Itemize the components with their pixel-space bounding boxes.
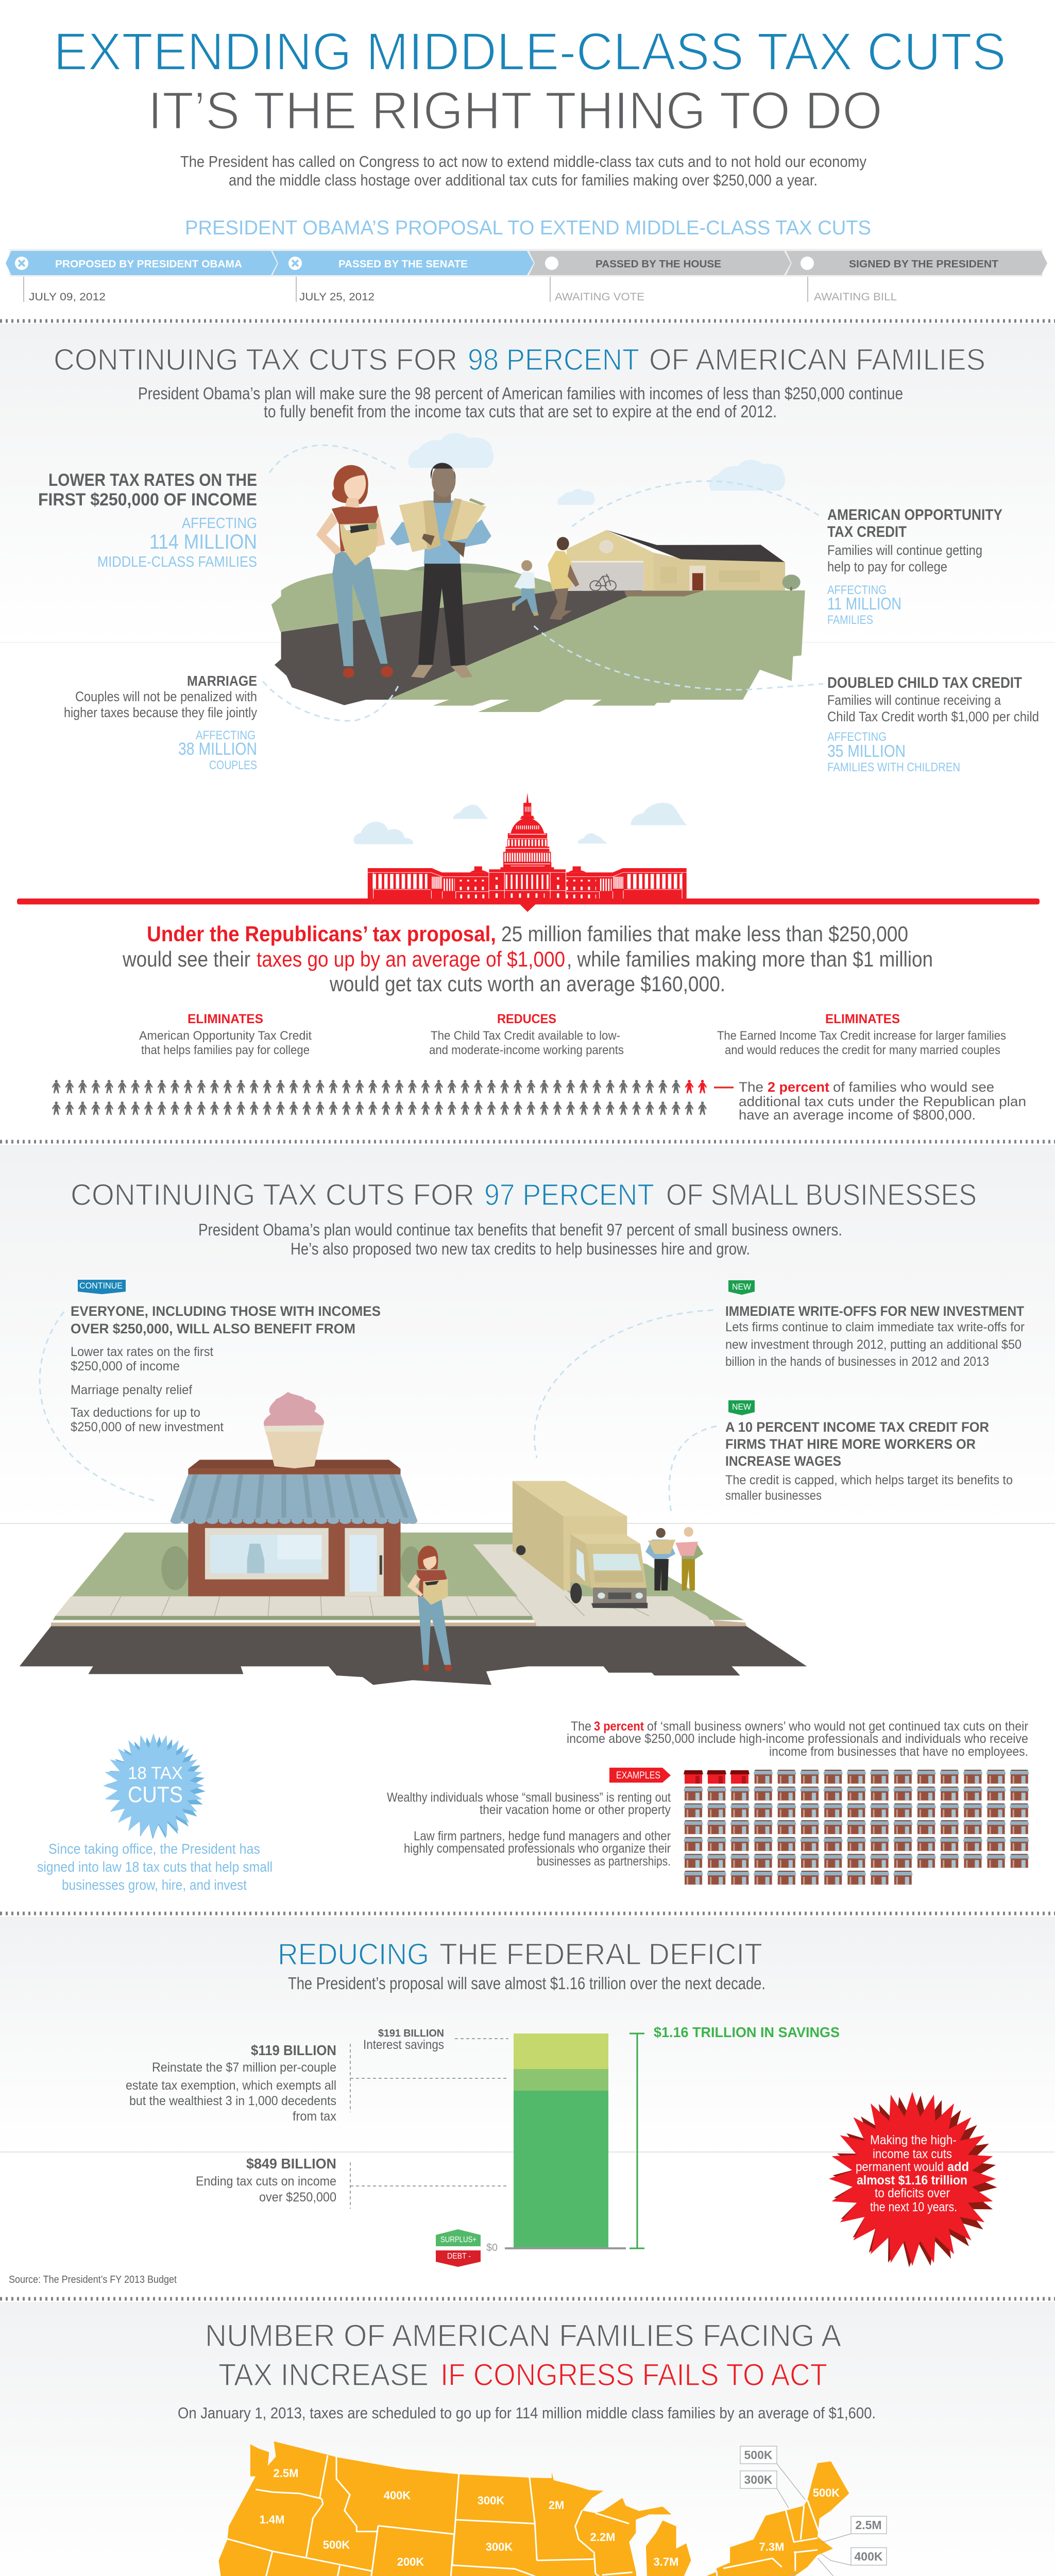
text: marriage: 38 MILLION bbox=[178, 739, 257, 759]
text: examples description: their vacation home or other property bbox=[480, 1803, 671, 1817]
bar chart: savings stack: $0 bbox=[486, 2242, 498, 2253]
figure: woman with bag bbox=[407, 1546, 452, 1671]
heading: 97 percent: CONTINUING TAX CUTS FOR bbox=[71, 1178, 474, 1212]
heading: 97 percent: OF SMALL BUSINESSES bbox=[666, 1178, 977, 1212]
heading: 97 percent: 97 PERCENT bbox=[484, 1178, 654, 1212]
column: eliminates earned income: and would reduces the credit for many married couples bbox=[725, 1043, 1000, 1057]
text: 3 percent note: 3 percent bbox=[594, 1719, 644, 1734]
ground bbox=[53, 1533, 744, 1620]
callout: 18 tax cuts starburst: CUTS bbox=[128, 1782, 183, 1807]
text: 849 billion: over $250,000 bbox=[259, 2190, 336, 2205]
column: eliminates american opportunity bbox=[139, 1012, 312, 1057]
map: state labels: 300K bbox=[478, 2494, 504, 2507]
map: state labels: 3.7M bbox=[654, 2555, 678, 2568]
text: 849 billion: $849 BILLION bbox=[246, 2156, 336, 2172]
chart: people pictogram bbox=[52, 1080, 734, 1116]
column: eliminates american opportunity: American Opportunity Tax Credit bbox=[139, 1029, 312, 1043]
text: immediate write-offs: billion in the hands of businesses in 2012 and 2013 bbox=[725, 1354, 989, 1369]
text: since taking office bbox=[37, 1841, 273, 1893]
tag: examples: EXAMPLES bbox=[616, 1770, 660, 1781]
road bbox=[20, 1626, 807, 1685]
text: 10 percent income tax credit bbox=[725, 1419, 1013, 1503]
text: 97 percent intro: President Obama’s plan would continue tax benefits that benefit 97 percent of small business owners. bbox=[198, 1221, 842, 1239]
badge: new bbox=[728, 1280, 755, 1295]
chart: small business pictogram bbox=[683, 1770, 1032, 1885]
road bbox=[275, 590, 642, 705]
icon: capitol building bbox=[354, 792, 687, 899]
timeline: bill progress bbox=[6, 249, 1047, 303]
text: 849 billion bbox=[196, 2156, 336, 2205]
column: eliminates american opportunity: that helps families pay for college bbox=[141, 1043, 310, 1057]
text: 97 percent intro: He’s also proposed two new tax credits to help businesses hire and grow. bbox=[291, 1240, 750, 1258]
timeline: bill progress: AWAITING BILL bbox=[814, 291, 897, 303]
text: 3 percent note: income from businesses that have no employees. bbox=[769, 1744, 1028, 1759]
panel: 97 percent background bbox=[0, 1145, 1055, 1523]
heading: 98 percent: CONTINUING TAX CUTS FOR bbox=[54, 343, 457, 377]
icon: cupcake bbox=[264, 1392, 324, 1468]
timeline: bill progress: PASSED BY THE SENATE bbox=[338, 259, 468, 270]
text: republicans' proposal: Under the Republicans’ tax proposal, bbox=[147, 922, 496, 946]
text: immediate write-offs: new investment through 2012, putting an additional $50 bbox=[725, 1337, 1022, 1352]
text: doubled child tax credit bbox=[827, 674, 1039, 774]
trees bbox=[161, 1546, 421, 1590]
column: eliminates earned income: The Earned Income Tax Credit increase for larger families bbox=[717, 1029, 1006, 1043]
text: examples description: Law firm partners, hedge fund managers and other bbox=[414, 1829, 671, 1843]
text: deficit intro: The President’s proposal will save almost $1.16 trillion over the next decade. bbox=[288, 1974, 765, 1993]
heading: reducing the deficit: REDUCING bbox=[278, 1938, 429, 1971]
text: 2 percent note: 2 percent bbox=[768, 1079, 829, 1095]
text: doubled child tax credit: 35 MILLION bbox=[827, 741, 906, 760]
text: republicans' proposal: , while families making more than $1 million bbox=[567, 947, 933, 971]
text: 10 percent income tax credit: smaller businesses bbox=[725, 1488, 822, 1503]
legend: surplus and debt bbox=[436, 2229, 481, 2267]
heading: 97 percent bbox=[71, 1178, 977, 1212]
badge: new second bbox=[728, 1400, 755, 1415]
text: american opportunity tax credit: help to pay for college bbox=[827, 559, 947, 574]
text: lower tax rates: MIDDLE-CLASS FAMILIES bbox=[97, 554, 257, 570]
text: lower tax rates bbox=[38, 470, 257, 570]
text: 2 percent note: additional tax cuts under the Republican plan bbox=[739, 1094, 1026, 1109]
column: reduces child tax credit: The Child Tax Credit available to low- bbox=[431, 1029, 620, 1043]
title: EXTENDING MIDDLE-CLASS TAX CUTS bbox=[54, 22, 1006, 81]
text: 97 percent intro bbox=[198, 1221, 842, 1258]
text: everyone benefits: $250,000 of income bbox=[71, 1359, 180, 1374]
truck bbox=[513, 1481, 648, 1608]
text: marriage: AFFECTING bbox=[196, 728, 256, 742]
map: state labels: 2M bbox=[549, 2499, 564, 2512]
text: examples description: businesses as partnerships. bbox=[537, 1854, 671, 1869]
callout: deficit starburst: add bbox=[947, 2160, 969, 2174]
text: everyone benefits: OVER $250,000, WILL ALSO BENEFIT FROM bbox=[71, 1321, 355, 1336]
callout: deficit starburst: the next 10 years. bbox=[870, 2200, 957, 2214]
house bbox=[567, 530, 801, 597]
text: examples description: Wealthy individuals whose “small business” is renting out bbox=[387, 1790, 671, 1805]
text: 2 percent note bbox=[739, 1079, 1026, 1123]
heading: 98 percent bbox=[54, 343, 985, 377]
text: since taking office: Since taking office, the President has bbox=[48, 1841, 260, 1857]
heading: 98 percent: OF AMERICAN FAMILIES bbox=[649, 343, 985, 377]
map: state labels: 200K bbox=[397, 2555, 424, 2568]
text: 10 percent income tax credit: The credit is capped, which helps target its benefits to bbox=[725, 1473, 1013, 1487]
text: everyone benefits bbox=[71, 1303, 381, 1434]
text: american opportunity tax credit: FAMILIES bbox=[827, 613, 873, 627]
map: callout boxes: 2.5M bbox=[855, 2518, 882, 2532]
figures: two men bbox=[645, 1527, 703, 1590]
heading: families facing increase bbox=[205, 2318, 841, 2392]
text: 2 percent note: have an average income of $800,000. bbox=[739, 1107, 976, 1123]
legend: surplus and debt: SURPLUS+ bbox=[440, 2235, 477, 2244]
text: lower tax rates: LOWER TAX RATES ON THE bbox=[48, 470, 257, 490]
heading: reducing the deficit: THE FEDERAL DEFICIT bbox=[439, 1938, 762, 1971]
text: 98 percent intro: to fully benefit from the income tax cuts that are set to expire at the end of 2012. bbox=[264, 402, 777, 421]
illustration: family and house bbox=[263, 433, 823, 721]
text: 10 percent income tax credit: FIRMS THAT HIRE MORE WORKERS OR bbox=[725, 1436, 976, 1452]
dashed connectors bbox=[263, 445, 823, 721]
source: Source: The President’s FY 2013 Budget bbox=[9, 2274, 177, 2285]
map: state labels: 400K bbox=[384, 2489, 411, 2502]
callout: deficit starburst: income tax cuts bbox=[873, 2147, 952, 2161]
text: american opportunity tax credit: AFFECTING bbox=[827, 583, 887, 597]
panel: 98 percent background bbox=[0, 324, 1055, 642]
text: american opportunity tax credit: TAX CREDIT bbox=[827, 523, 907, 540]
text: marriage: Couples will not be penalized with bbox=[75, 689, 257, 704]
callout: 18 tax cuts starburst: 18 TAX bbox=[128, 1764, 183, 1783]
text: marriage: higher taxes because they file jointly bbox=[64, 705, 257, 720]
text: everyone benefits: $250,000 of new investment bbox=[71, 1420, 224, 1434]
map: united states bbox=[218, 2442, 849, 2576]
text: 10 percent income tax credit: INCREASE WAGES bbox=[725, 1453, 841, 1469]
text: republicans' proposal: would get tax cuts worth an average $160,000. bbox=[329, 972, 725, 996]
text: american opportunity tax credit bbox=[827, 506, 1002, 627]
text: doubled child tax credit: AFFECTING bbox=[827, 730, 887, 744]
text: immediate write-offs: IMMEDIATE WRITE-OFFS FOR NEW INVESTMENT bbox=[725, 1303, 1024, 1319]
timeline: bill progress: SIGNED BY THE PRESIDENT bbox=[849, 259, 998, 270]
text: lower tax rates: AFFECTING bbox=[182, 515, 257, 532]
text: 119 billion: from tax bbox=[293, 2109, 336, 2124]
text: 119 billion bbox=[126, 2042, 336, 2124]
badge: new: NEW bbox=[732, 1282, 751, 1292]
heading: families facing increase: TAX INCREASE bbox=[218, 2358, 429, 2392]
intro text: and the middle class hostage over additional tax cuts for families making over $250,000 a year. bbox=[229, 171, 818, 189]
text: american opportunity tax credit: Families will continue getting bbox=[827, 543, 982, 558]
map: callout boxes bbox=[161, 2446, 887, 2576]
figure: woman with bag bbox=[316, 465, 393, 678]
text: since taking office: signed into law 18 tax cuts that help small bbox=[37, 1859, 273, 1875]
callout: deficit starburst: permanent would bbox=[856, 2160, 944, 2174]
text: 119 billion: estate tax exemption, which exempts all bbox=[126, 2078, 336, 2093]
column: reduces child tax credit bbox=[429, 1012, 624, 1057]
callout: deficit starburst: to deficits over bbox=[875, 2186, 950, 2200]
text: everyone benefits: Marriage penalty relief bbox=[71, 1383, 192, 1397]
callout: deficit starburst: Making the high- bbox=[870, 2133, 957, 2147]
map: state labels: 1.4M bbox=[260, 2513, 284, 2526]
map: state labels bbox=[245, 2467, 840, 2576]
text: 98 percent intro bbox=[138, 384, 903, 421]
timeline: bill progress: JULY 25, 2012 bbox=[299, 291, 375, 303]
callout: deficit starburst bbox=[827, 2090, 1003, 2273]
text: examples description: highly compensated professionals who organize their bbox=[404, 1841, 671, 1856]
illustration: shop and truck bbox=[20, 1392, 807, 1685]
timeline: bill progress: JULY 09, 2012 bbox=[29, 291, 106, 303]
bar chart: savings stack: $1.16 TRILLION IN SAVINGS bbox=[654, 2024, 840, 2040]
text: marriage: COUPLES bbox=[209, 758, 257, 772]
text: everyone benefits: Tax deductions for up to bbox=[71, 1405, 200, 1420]
bar chart: savings stack bbox=[350, 2024, 840, 2253]
text: lower tax rates: 114 MILLION bbox=[149, 531, 257, 553]
column: eliminates earned income bbox=[717, 1012, 1006, 1057]
dashed connectors: business bbox=[40, 1310, 717, 1514]
map: state labels: 500K bbox=[323, 2538, 350, 2551]
text: immediate write-offs bbox=[725, 1303, 1025, 1369]
text: 119 billion: but the wealthiest 3 in 1,000 decedents bbox=[129, 2094, 336, 2108]
text: examples description bbox=[387, 1790, 671, 1869]
text: 191 billion: $191 BILLION bbox=[378, 2028, 444, 2039]
text: everyone benefits: Lower tax rates on the first bbox=[71, 1345, 213, 1359]
icon: clouds bbox=[409, 433, 785, 505]
text: 191 billion bbox=[363, 2028, 444, 2052]
text: marriage: MARRIAGE bbox=[187, 673, 257, 689]
heading: 98 percent: 98 PERCENT bbox=[468, 343, 639, 377]
text: republicans' proposal bbox=[122, 922, 933, 996]
text: 119 billion: $119 BILLION bbox=[251, 2042, 336, 2058]
panel: map background bbox=[0, 2302, 1055, 2576]
heading: reducing the deficit bbox=[278, 1938, 762, 1971]
figure: adult walking bbox=[548, 537, 579, 620]
text: doubled child tax credit: Families will continue receiving a bbox=[827, 692, 1001, 708]
text: 119 billion: Reinstate the $7 million per-couple bbox=[152, 2060, 336, 2075]
badge: new second: NEW bbox=[732, 1402, 751, 1412]
text: american opportunity tax credit: AMERICAN OPPORTUNITY bbox=[827, 506, 1002, 523]
map: state labels: 2.2M bbox=[590, 2531, 615, 2544]
map: state labels: 300K bbox=[486, 2540, 513, 2553]
map: callout boxes: 500K bbox=[744, 2448, 773, 2462]
text: 3 percent note: The bbox=[571, 1719, 591, 1734]
map: state labels: 500K bbox=[813, 2486, 840, 2499]
figure: child running bbox=[512, 560, 539, 616]
shop building bbox=[171, 1460, 417, 1596]
title bbox=[54, 22, 1006, 140]
legend: surplus and debt: DEBT - bbox=[447, 2252, 471, 2261]
text: doubled child tax credit: FAMILIES WITH CHILDREN bbox=[827, 760, 960, 774]
text: republicans' proposal: 25 million families that make less than $250,000 bbox=[501, 922, 908, 946]
text: map intro: On January 1, 2013, taxes are scheduled to go up for 114 million middle class families by an average of $1,600. bbox=[178, 2404, 876, 2422]
red divider bar bbox=[17, 899, 1040, 912]
text: 849 billion: Ending tax cuts on income bbox=[196, 2174, 336, 2189]
column: reduces child tax credit: and moderate-income working parents bbox=[429, 1043, 624, 1057]
badge: continue: CONTINUE bbox=[79, 1281, 123, 1291]
text: lower tax rates: FIRST $250,000 OF INCOME bbox=[38, 490, 257, 510]
timeline: bill progress: AWAITING VOTE bbox=[555, 291, 644, 303]
callout: deficit starburst: almost $1.16 trillion bbox=[857, 2173, 967, 2188]
text: everyone benefits: EVERYONE, INCLUDING THOSE WITH INCOMES bbox=[71, 1303, 381, 1319]
hills and lawn bbox=[271, 564, 805, 712]
heading: families facing increase: NUMBER OF AMERICAN FAMILIES FACING A bbox=[205, 2318, 841, 2353]
map: state labels: 7.3M bbox=[759, 2540, 784, 2553]
text: immediate write-offs: Lets firms continue to claim immediate tax write-offs for bbox=[725, 1320, 1025, 1334]
text: since taking office: businesses grow, hire, and invest bbox=[62, 1877, 247, 1893]
timeline heading: PRESIDENT OBAMA’S PROPOSAL TO EXTEND MIDDLE-CLASS TAX CUTS bbox=[185, 217, 871, 239]
text: american opportunity tax credit: 11 MILLION bbox=[827, 594, 901, 613]
figure: man with bags bbox=[390, 463, 491, 678]
column: eliminates american opportunity: ELIMINATES bbox=[188, 1012, 263, 1026]
tag: examples bbox=[609, 1768, 671, 1783]
intro text bbox=[180, 152, 866, 189]
text: 2 percent note: The bbox=[739, 1079, 763, 1095]
text: 3 percent note: of ‘small business owners’ who would not get continued tax cuts on their bbox=[647, 1719, 1028, 1734]
text: 3 percent note bbox=[567, 1719, 1028, 1759]
callout: 18 tax cuts starburst bbox=[103, 1733, 209, 1843]
column: eliminates earned income: ELIMINATES bbox=[825, 1012, 900, 1026]
title: IT’S THE RIGHT THING TO DO bbox=[148, 81, 882, 140]
text: republicans' proposal: would see their bbox=[122, 947, 250, 971]
map: callout boxes: 400K bbox=[855, 2550, 883, 2563]
text: marriage bbox=[64, 673, 257, 772]
map: state labels: 2.5M bbox=[274, 2467, 298, 2480]
column: reduces child tax credit: REDUCES bbox=[497, 1012, 556, 1026]
text: 3 percent note: income above $250,000 include high-income professionals and individuals who receive bbox=[567, 1732, 1028, 1746]
panel: deficit background bbox=[0, 1917, 1055, 2152]
sidewalk and driveway bbox=[51, 1545, 746, 1626]
text: republicans' proposal: taxes go up by an average of $1,000 bbox=[257, 947, 565, 971]
text: 10 percent income tax credit: A 10 PERCENT INCOME TAX CREDIT FOR bbox=[725, 1419, 989, 1435]
intro text: The President has called on Congress to act now to extend middle-class tax cuts and to not hold our economy bbox=[180, 152, 866, 171]
timeline: bill progress: PASSED BY THE HOUSE bbox=[595, 259, 721, 270]
badge: continue bbox=[78, 1280, 126, 1294]
text: 191 billion: Interest savings bbox=[363, 2038, 444, 2052]
text: 2 percent note: of families who would see bbox=[833, 1079, 994, 1095]
text: 98 percent intro: President Obama’s plan will make sure the 98 percent of American families with incomes of less than $250,000 continue bbox=[138, 384, 903, 403]
map: callout boxes: 300K bbox=[744, 2473, 773, 2486]
heading: families facing increase: IF CONGRESS FAILS TO ACT bbox=[440, 2358, 827, 2392]
text: doubled child tax credit: DOUBLED CHILD TAX CREDIT bbox=[827, 674, 1022, 691]
timeline: bill progress: PROPOSED BY PRESIDENT OBAMA bbox=[55, 259, 242, 270]
